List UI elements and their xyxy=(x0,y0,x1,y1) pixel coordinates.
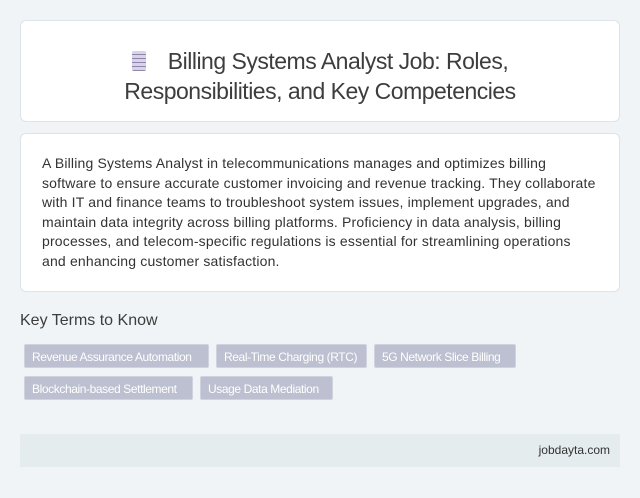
description text: A Billing Systems Analyst in telecommunications manages and optimizes billing xyxy=(42,155,546,171)
description card xyxy=(20,133,620,292)
tag xyxy=(216,344,367,368)
title card xyxy=(20,20,620,122)
footer xyxy=(20,434,620,467)
tag: Usage Data Mediation xyxy=(208,382,319,396)
title: Responsibilities, and Key Competencies xyxy=(124,78,516,104)
description text: software to ensure accurate customer invoicing and revenue tracking. They collaborate xyxy=(42,174,596,190)
description text: processes, and telecom-specific regulations is essential for streamlining operations xyxy=(42,233,571,249)
tag xyxy=(200,376,333,400)
description text: and enhancing customer satisfaction. xyxy=(42,252,280,268)
tag xyxy=(374,344,516,368)
tag: 5G Network Slice Billing xyxy=(382,350,500,364)
icon: receipt xyxy=(132,51,146,71)
footer text: jobdayta.com xyxy=(539,443,610,457)
title xyxy=(124,48,516,104)
tag: Revenue Assurance Automation xyxy=(32,350,192,364)
heading: key terms: Key Terms to Know xyxy=(20,312,158,329)
description text: with IT and finance teams to troubleshoot system issues, implement upgrades, and xyxy=(42,194,570,210)
title: Billing Systems Analyst Job: Roles, xyxy=(168,48,508,74)
tag xyxy=(24,344,209,368)
description text: maintain data integrity across billing platforms. Proficiency in data analysis, billing xyxy=(42,214,561,230)
tag: Real-Time Charging (RTC) xyxy=(224,350,357,364)
description text xyxy=(42,155,596,269)
tag: Blockchain-based Settlement xyxy=(32,382,177,396)
tag xyxy=(24,376,193,400)
